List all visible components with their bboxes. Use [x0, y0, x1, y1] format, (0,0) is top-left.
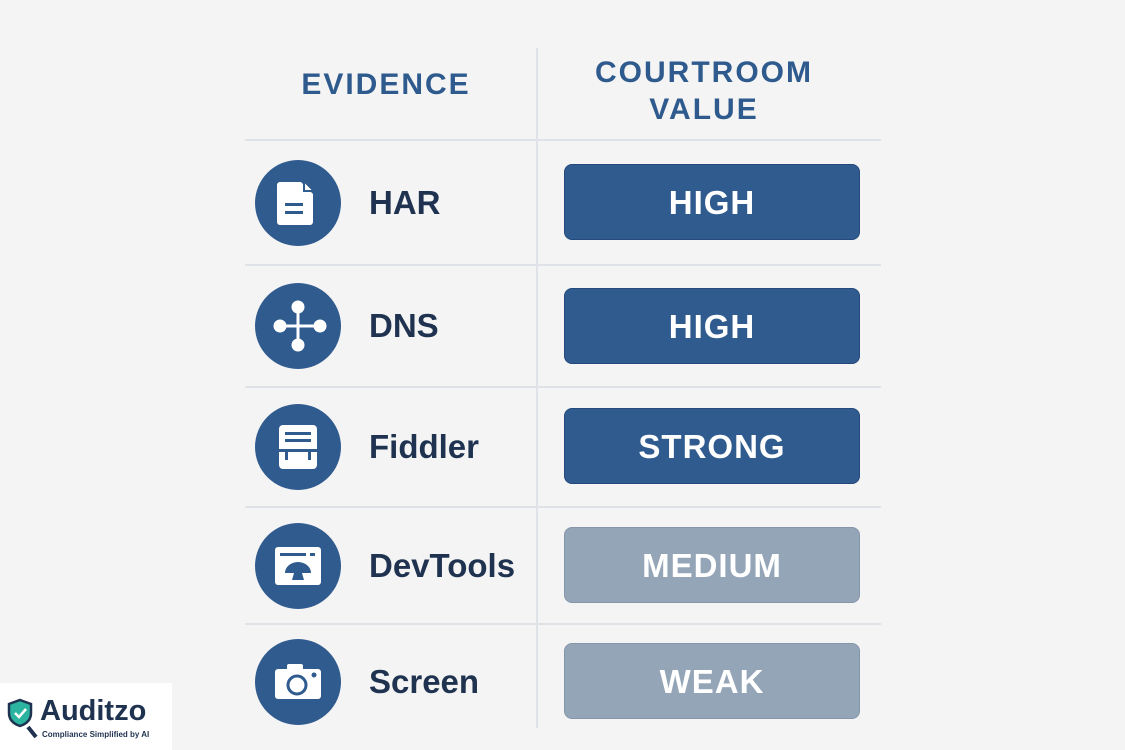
label: Screen: Screen: [369, 663, 479, 700]
badge: DevTools medium: MEDIUM: [642, 547, 782, 584]
logo: Auditzo: Compliance Simplified by AI: [42, 730, 149, 739]
heading: courtroom value: COURTROOM: [595, 56, 813, 89]
logo: Auditzo: [0, 683, 172, 750]
icon: fiddler: [255, 404, 341, 490]
heading: evidence: EVIDENCE: [301, 68, 471, 101]
badge: DevTools medium: [564, 527, 860, 603]
logo: Auditzo: Auditzo: [40, 695, 146, 727]
icon: network: [255, 283, 341, 369]
badge: HAR high: [564, 164, 860, 240]
icon: document: [255, 160, 341, 246]
badge: DNS high: [564, 288, 860, 364]
heading: courtroom value: [595, 56, 813, 126]
label: DNS: DNS: [369, 307, 439, 344]
badge: HAR high: HIGH: [669, 184, 755, 221]
badge: Fiddler strong: STRONG: [638, 428, 786, 465]
badge: DNS high: HIGH: [669, 308, 755, 345]
icon: camera: [255, 639, 341, 725]
label: Fiddler: Fiddler: [369, 428, 479, 465]
icon: devtools: [255, 523, 341, 609]
badge: Screen weak: [564, 643, 860, 719]
badge: Screen weak: WEAK: [660, 663, 764, 700]
heading: courtroom value: VALUE: [649, 93, 759, 126]
badge: Fiddler strong: [564, 408, 860, 484]
label: HAR: HAR: [369, 184, 440, 221]
label: DevTools: DevTools: [369, 547, 515, 584]
